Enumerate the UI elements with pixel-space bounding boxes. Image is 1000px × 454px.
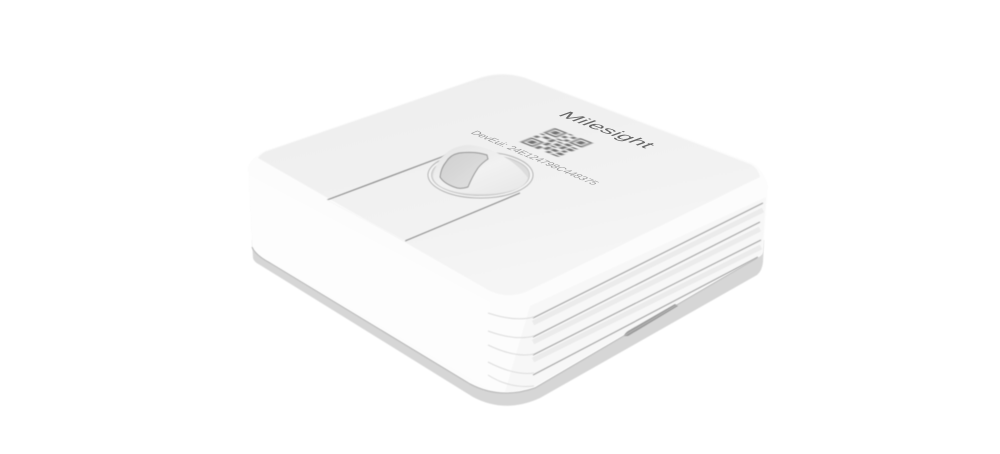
base edge line [252, 247, 757, 393]
white device body [248, 74, 768, 393]
top face [258, 74, 760, 295]
side grooves, front corner [488, 313, 534, 387]
dome window [440, 152, 488, 188]
dome body [433, 145, 528, 194]
grey base plate [252, 240, 764, 406]
side grooves, right face [533, 203, 763, 375]
dome ring [428, 152, 533, 198]
right side shading [505, 197, 766, 392]
PIR sensor dome [428, 145, 533, 198]
device EUI label: DevEui: 24E124798C448375 [467, 130, 601, 186]
left side shading [249, 175, 490, 390]
brand logo: Milesight [553, 110, 660, 150]
QR code [520, 128, 593, 157]
base slot [624, 304, 678, 336]
top panel lines [327, 155, 520, 241]
